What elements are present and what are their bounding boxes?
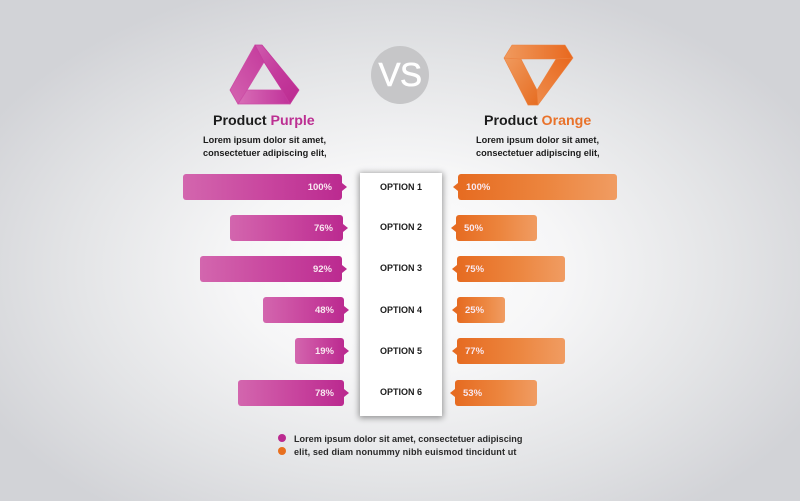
heading: Product Purple: Product Purple — [213, 113, 315, 129]
orange bar: option 2: 50% — [464, 223, 483, 234]
label: option 3: OPTION 3 — [380, 263, 422, 273]
icon: VS badge: VS — [378, 56, 422, 93]
purple bar: option 1 — [183, 174, 342, 200]
purple bar: option 5 — [295, 338, 344, 364]
orange bar: option 2 — [456, 215, 537, 241]
legend: text: Lorem ipsum dolor sit amet, consectetuer adipiscing — [294, 434, 522, 444]
legend: orange dot — [278, 447, 286, 455]
label: option 6: OPTION 6 — [380, 387, 422, 397]
orange bar: option 1: 100% — [466, 182, 490, 193]
orange bar: option 4 — [457, 297, 505, 323]
purple bar: option 4: 48% — [315, 305, 334, 316]
label: option 2: OPTION 2 — [380, 222, 422, 232]
orange bar: option 1 — [458, 174, 617, 200]
text: purple description — [203, 135, 327, 158]
orange bar: option 3: 75% — [465, 264, 484, 275]
purple bar: option 4 — [263, 297, 344, 323]
text: orange description: Lorem ipsum dolor sit amet, — [476, 135, 599, 145]
orange bar: option 5: 77% — [465, 346, 484, 357]
purple bar: option 6: 78% — [315, 388, 334, 399]
orange bar: option 5 — [457, 338, 565, 364]
orange bar: option 4: 25% — [465, 305, 484, 316]
text: purple description: Lorem ipsum dolor sit amet, — [203, 135, 326, 145]
icon: VS badge — [371, 46, 429, 104]
orange bar: option 3 — [457, 256, 565, 282]
orange bar: option 6: 53% — [463, 388, 482, 399]
legend: purple dot — [278, 434, 286, 442]
purple bar: option 2 — [230, 215, 343, 241]
panel: options card — [360, 173, 442, 416]
legend: text: elit, sed diam nonummy nibh euismod tincidunt ut — [294, 446, 517, 456]
purple bar: option 1: 100% — [308, 182, 332, 193]
legend: text — [294, 434, 522, 457]
text: purple description: consectetuer adipiscing elit, — [203, 148, 327, 158]
label: option 1: OPTION 1 — [380, 182, 422, 192]
text: orange description — [476, 135, 600, 158]
purple bar: option 2: 76% — [314, 223, 333, 234]
text: orange description: consectetuer adipiscing elit, — [476, 148, 600, 158]
label: option 4: OPTION 4 — [380, 305, 422, 315]
icon: orange inverted triangle logo — [504, 44, 574, 106]
purple bar: option 6 — [238, 380, 344, 406]
purple bar: option 5: 19% — [315, 346, 334, 357]
purple bar: option 3: 92% — [313, 264, 332, 275]
purple bar: option 3 — [200, 256, 342, 282]
label: option 5: OPTION 5 — [380, 346, 422, 356]
heading: Product Orange: Product Orange — [484, 113, 591, 129]
orange bar: option 6 — [455, 380, 537, 406]
icon: purple triangle logo — [230, 44, 300, 104]
